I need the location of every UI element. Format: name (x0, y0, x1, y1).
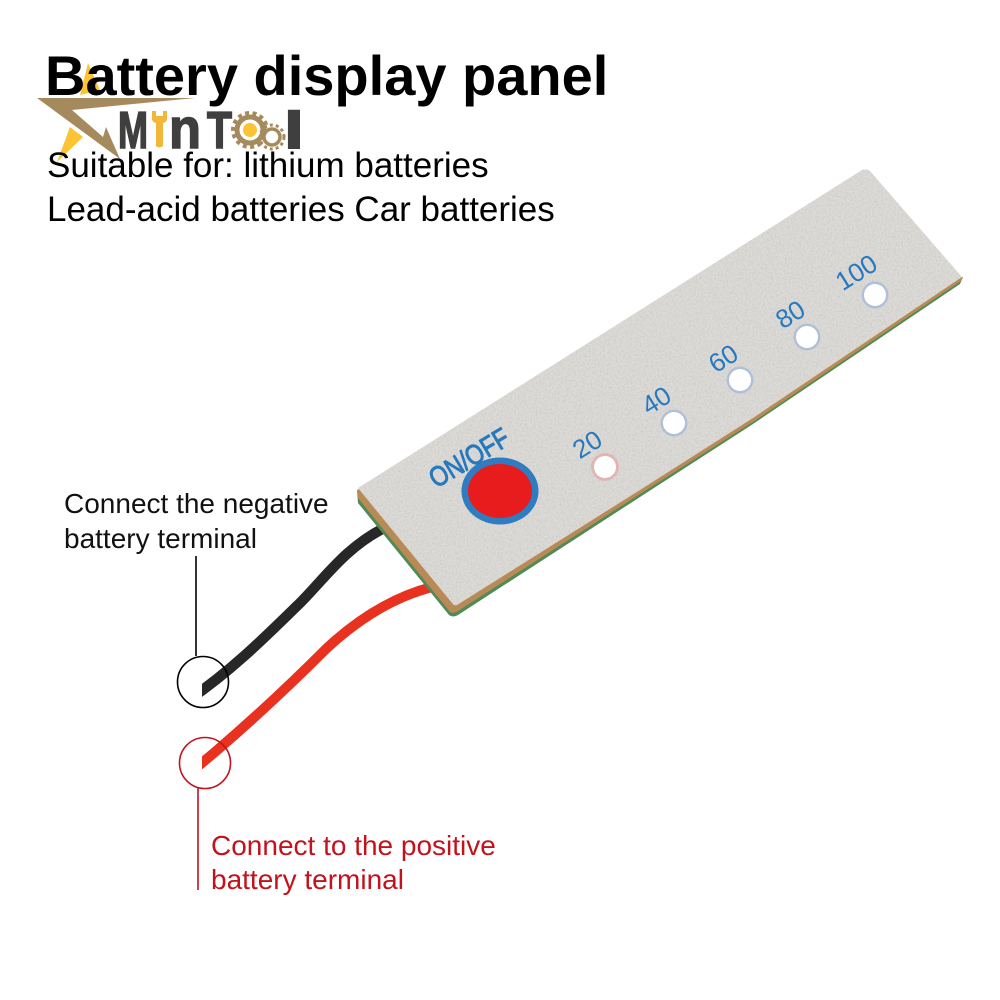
icon: gears (233, 113, 284, 149)
black wire (190, 528, 384, 699)
label: positive terminal: Connect to the positive (211, 830, 496, 861)
logo wordmark: n (169, 97, 201, 161)
label: positive terminal (211, 830, 496, 895)
icon: yellow star (57, 63, 100, 162)
indicator 80: 80 (770, 294, 810, 335)
indicator 60 (703, 338, 754, 394)
indicator 60: 60 (703, 338, 743, 379)
logo wordmark (118, 97, 304, 161)
callout: negative terminal marker (178, 556, 228, 708)
indicator 20 (567, 424, 619, 481)
logo wordmark: M (118, 102, 148, 160)
wire end masks (180, 660, 202, 800)
indicator 100: 100 (830, 248, 883, 297)
text block: suitable batteries: Suitable for: lithium batteries (47, 146, 489, 185)
indicator 40: 40 (636, 380, 676, 421)
indicator 20: 20 (567, 424, 607, 465)
icon: wrench letter (152, 111, 167, 148)
board face (358, 169, 962, 605)
title: Battery display panel (45, 44, 608, 107)
power button (462, 458, 538, 524)
indicator 40 (636, 380, 688, 436)
icon: gold arrow mark (37, 98, 195, 159)
logo wordmark: l (284, 102, 304, 160)
logo wordmark: T (207, 102, 232, 160)
indicator 80 (770, 294, 820, 350)
callout: positive terminal marker (180, 738, 230, 890)
text block: suitable batteries: Lead-acid batteries Car batteries (47, 190, 555, 229)
label: negative terminal (64, 488, 329, 554)
panel: battery display board (340, 160, 980, 620)
logo: Min Tool watermark (37, 63, 304, 162)
text block: suitable batteries (47, 146, 555, 229)
label: positive terminal: battery terminal (211, 864, 404, 895)
on/off label: ON/OFF (423, 422, 515, 494)
label: negative terminal: battery terminal (64, 523, 257, 554)
label: negative terminal: Connect the negative (64, 488, 329, 519)
red wire (190, 587, 432, 773)
board edge (357, 277, 963, 616)
